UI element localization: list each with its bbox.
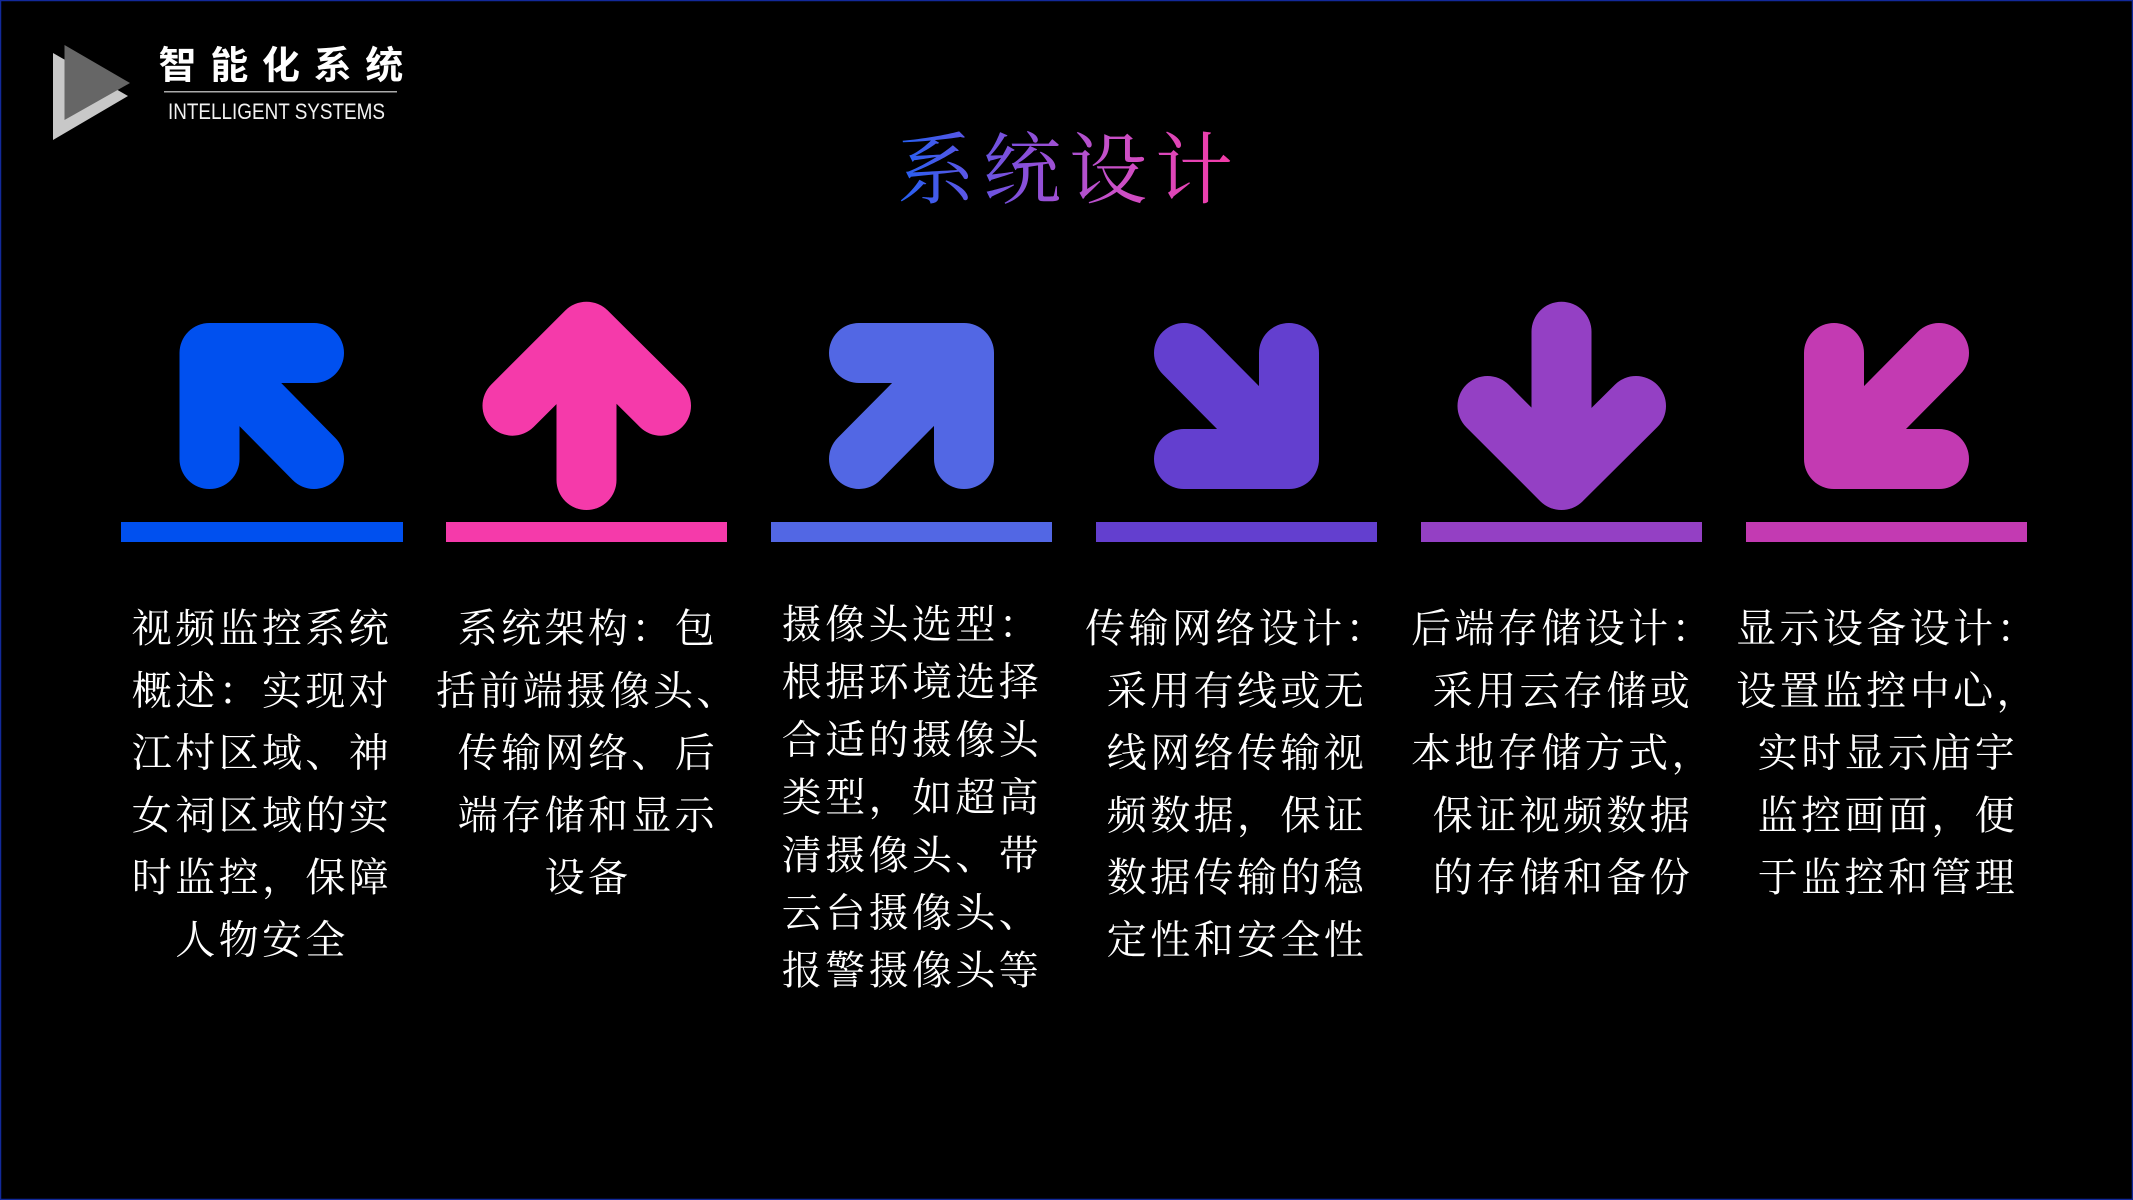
text block: 视频监控系统 xyxy=(132,606,392,651)
text block: 根据环境选择 xyxy=(782,660,1042,705)
panel: video surveillance overview xyxy=(121,353,403,962)
text block: 后端存储设计： xyxy=(1411,606,1715,651)
text block: 括前端摄像头、 xyxy=(436,668,740,713)
text block: 江村区域、神 xyxy=(132,731,392,776)
text block: 频数据，保证 xyxy=(1107,793,1367,838)
text block: 报警摄像头等 xyxy=(782,948,1042,993)
text block: 云台摄像头、 xyxy=(782,890,1042,936)
text block: 时监控，保障 xyxy=(132,855,392,900)
text block: 人物安全 xyxy=(175,918,349,962)
bar xyxy=(771,522,1052,542)
panel: camera selection xyxy=(771,353,1052,993)
text block: 摄像头选型： xyxy=(782,602,1042,647)
text block: 实时显示庙宇 xyxy=(1758,731,2018,776)
text block: 端存储和显示 xyxy=(458,793,718,838)
text block: 合适的摄像头 xyxy=(782,717,1042,762)
title: 系统设计 xyxy=(897,127,1241,214)
text block: 本地存储方式， xyxy=(1411,731,1715,776)
text block: 的存储和备份 xyxy=(1433,855,1693,900)
logo title: 智能化系统 xyxy=(158,46,417,88)
icon: play triangles xyxy=(53,45,130,140)
text block: 数据传输的稳 xyxy=(1107,855,1367,900)
panel: display device design xyxy=(1736,353,2040,900)
text block: 保证视频数据 xyxy=(1433,793,1693,838)
text block: 于监控和管理 xyxy=(1758,855,2018,900)
bar xyxy=(1421,522,1702,542)
text block: 设备 xyxy=(545,855,631,900)
text block: 清摄像头、带 xyxy=(782,833,1042,878)
text block: 类型，如超高 xyxy=(782,775,1042,820)
text block: 采用云存储或 xyxy=(1433,668,1693,713)
text block: 概述：实现对 xyxy=(132,668,392,713)
icon: arrow down-left xyxy=(1834,353,1939,459)
icon: arrow down-right xyxy=(1184,353,1289,459)
text block: 线网络传输视 xyxy=(1107,731,1367,776)
text block: 传输网络、后 xyxy=(458,731,718,776)
text block: 采用有线或无 xyxy=(1107,668,1367,713)
text block: 传输网络设计： xyxy=(1085,606,1389,651)
bar xyxy=(121,522,403,542)
panel: transmission network design xyxy=(1085,353,1389,962)
text block: 女祠区域的实 xyxy=(132,793,392,838)
icon: arrow up-left xyxy=(210,353,314,459)
text block: 系统架构：包 xyxy=(458,606,718,651)
bar xyxy=(1096,522,1377,542)
logo subtitle: INTELLIGENT SYSTEMS xyxy=(168,99,385,124)
panel: system architecture xyxy=(436,332,740,900)
text block: 监控画面，便 xyxy=(1758,793,2018,838)
icon: arrow down xyxy=(1488,332,1636,480)
bar xyxy=(446,522,727,542)
logo xyxy=(53,45,417,140)
text block: 设置监控中心， xyxy=(1736,668,2040,713)
icon: arrow up-right xyxy=(859,353,964,459)
text block: 定性和安全性 xyxy=(1107,918,1367,962)
panel: backend storage design xyxy=(1411,332,1715,900)
text block: 显示设备设计： xyxy=(1736,606,2040,651)
bar xyxy=(1746,522,2027,542)
icon: arrow up xyxy=(512,332,661,480)
